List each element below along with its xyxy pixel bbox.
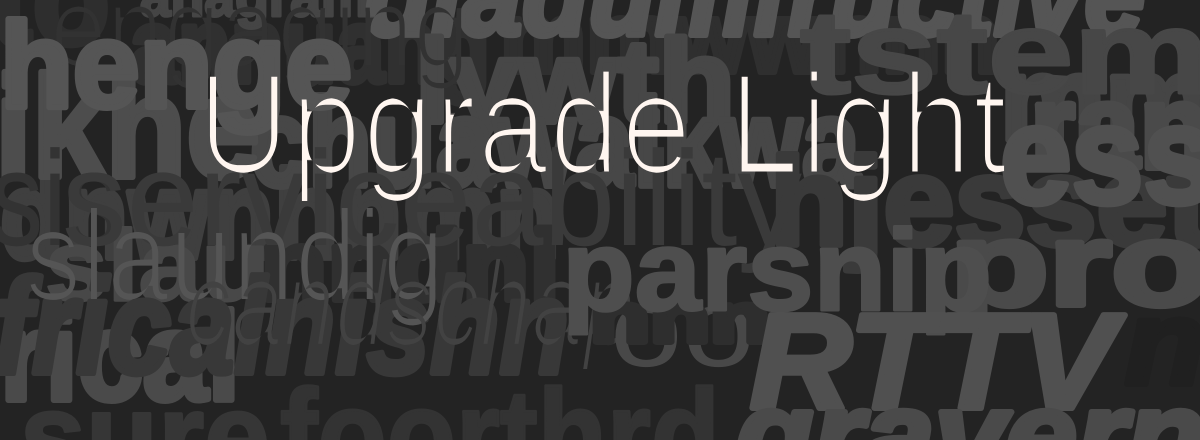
background word collage: nnn bbox=[590, 279, 770, 357]
background word collage: pro bbox=[950, 199, 1200, 331]
background word collage: rical bbox=[0, 288, 240, 427]
background word collage: henge bbox=[0, 0, 352, 133]
background word collage: chuawalkwa bbox=[250, 74, 861, 213]
title: Upgrade Light bbox=[197, 45, 1008, 204]
background word collage: lywth bbox=[415, 16, 735, 148]
background word collage: ikhe bbox=[0, 46, 260, 208]
background word collage: fricalnishn bbox=[0, 251, 569, 402]
background word collage: hjesset bbox=[770, 133, 1200, 272]
background word collage: slau bbox=[45, 210, 270, 322]
background word collage: n bbox=[1125, 276, 1200, 410]
background word collage: parsnip bbox=[562, 207, 992, 335]
background word collage: dnwnhnmn bbox=[0, 146, 560, 285]
background word collage: RTTV bbox=[750, 286, 1125, 437]
background word collage: serviceability bbox=[62, 123, 802, 274]
background word collage: oo bbox=[610, 265, 755, 390]
background word collage: candschap bbox=[185, 237, 635, 371]
background word collage: nndnl bbox=[260, 210, 560, 322]
background word collage: slaundig bbox=[25, 185, 445, 328]
